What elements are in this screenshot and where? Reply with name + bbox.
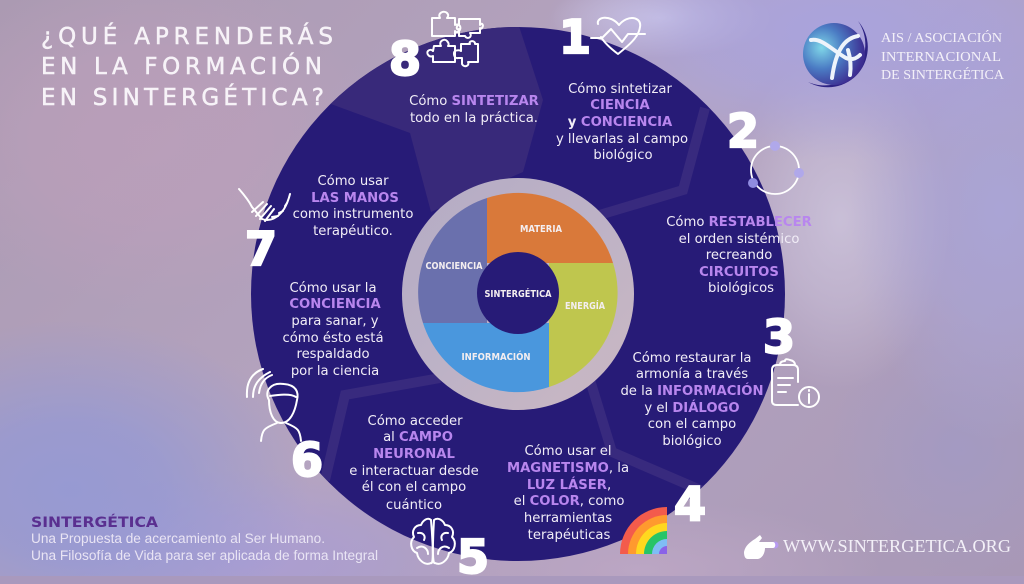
text 3: de la bbox=[620, 384, 657, 399]
text 3: y el bbox=[644, 401, 672, 416]
text 3: biológico bbox=[662, 433, 722, 449]
title: EN SINTERGÉTICA? bbox=[41, 83, 324, 111]
segment labels: CONCIENCIA bbox=[426, 261, 483, 272]
text 6: cómo ésto está bbox=[282, 330, 384, 346]
title bbox=[41, 22, 333, 111]
text 2: Cómo bbox=[666, 214, 709, 230]
logo: AIS bbox=[803, 21, 1004, 87]
logo sphere bbox=[803, 23, 865, 85]
text 1: biológico bbox=[593, 147, 653, 163]
icon: brain bbox=[411, 519, 455, 564]
outer ring bbox=[402, 178, 634, 410]
footer tagline: SINTERGÉTICA bbox=[31, 514, 158, 531]
text 2: biológicos bbox=[708, 280, 774, 296]
text 8: Cómo bbox=[409, 93, 452, 109]
logo text: AIS / ASOCIACIÓN bbox=[881, 30, 1002, 45]
icon: heart pulse bbox=[591, 18, 645, 54]
item 8 bbox=[389, 12, 539, 126]
number 1: 1 bbox=[559, 10, 591, 64]
text 5: NEURONAL bbox=[373, 447, 455, 462]
icon: head with waves bbox=[247, 369, 301, 441]
main dark circle bbox=[251, 20, 785, 561]
logo crescent bbox=[808, 21, 868, 87]
text 5: él con el campo bbox=[362, 479, 466, 495]
text 4: , la bbox=[609, 461, 629, 476]
segment labels bbox=[426, 224, 606, 363]
text 4: , bbox=[607, 478, 611, 493]
item 7 bbox=[239, 173, 413, 276]
lighter segment behind item 8 bbox=[320, 20, 543, 212]
text 8: todo en la práctica. bbox=[410, 110, 538, 126]
segment: energia bbox=[549, 263, 618, 387]
center circle bbox=[477, 252, 559, 334]
footer tagline: Una Propuesta de acercamiento al Ser Humano. bbox=[31, 531, 325, 546]
central diagram bbox=[402, 178, 634, 410]
text 6: CONCIENCIA bbox=[289, 297, 381, 312]
text 3: Cómo restaurar la bbox=[633, 350, 751, 366]
text 2: CIRCUITOS bbox=[699, 265, 779, 280]
text 7: como instrumento bbox=[293, 207, 413, 222]
text 7: terapéutico. bbox=[313, 223, 393, 239]
logo text bbox=[881, 30, 1004, 82]
text 5: Cómo acceder bbox=[368, 413, 463, 429]
segment: conciencia bbox=[418, 198, 487, 323]
text 6: Cómo usar la bbox=[289, 280, 377, 296]
item 6 bbox=[247, 280, 384, 487]
logo text: INTERNACIONAL bbox=[881, 49, 1001, 64]
text 4: herramientas bbox=[524, 511, 612, 526]
footer tagline: Una Filosofía de Vida para ser aplicada de forma Integral bbox=[31, 548, 378, 563]
text 4: terapéuticas bbox=[528, 527, 610, 543]
text 2: recreando bbox=[706, 248, 772, 263]
item 1 bbox=[556, 10, 688, 163]
segment labels: MATERIA bbox=[520, 224, 563, 235]
text 3: armonía a través bbox=[636, 366, 748, 382]
website link bbox=[744, 535, 1011, 559]
text 1: y bbox=[568, 115, 581, 130]
item 3 bbox=[620, 310, 819, 449]
text 2: el orden sistémico bbox=[679, 231, 799, 247]
text 4: MAGNETISMO bbox=[507, 461, 609, 476]
text 6: respaldado bbox=[296, 347, 370, 362]
number 5: 5 bbox=[457, 530, 489, 584]
segment labels: SINTERGÉTICA bbox=[484, 288, 552, 300]
text 4: LUZ LÁSER bbox=[527, 476, 607, 493]
website text: WWW.SINTERGETICA.ORG bbox=[783, 536, 1011, 556]
text 6: por la ciencia bbox=[291, 364, 379, 379]
text 3: DIÁLOGO bbox=[672, 399, 740, 416]
title: EN LA FORMACIÓN bbox=[41, 52, 322, 80]
number 3: 3 bbox=[763, 310, 795, 364]
text 4: el bbox=[514, 494, 530, 509]
text 4: COLOR, como bbox=[530, 494, 624, 509]
icon: hands bbox=[239, 189, 290, 221]
text 1: y llevarlas al campo bbox=[556, 132, 688, 147]
text 1: CONCIENCIA bbox=[581, 115, 673, 130]
text 3: con el campo bbox=[648, 417, 736, 432]
text 5: CAMPO bbox=[399, 430, 453, 445]
segment labels: ENERGÍA bbox=[565, 300, 606, 312]
text 6: para sanar, y bbox=[291, 314, 379, 329]
text 1: Cómo sintetizar bbox=[568, 81, 672, 97]
number 7: 7 bbox=[245, 222, 277, 276]
text 4: Cómo usar el bbox=[524, 443, 612, 459]
text 3: INFORMACIÓN bbox=[657, 381, 764, 399]
segment: informacion bbox=[423, 323, 549, 392]
number 8: 8 bbox=[389, 32, 421, 86]
text 5: al bbox=[383, 430, 399, 445]
icon: circuit ring bbox=[748, 141, 804, 194]
item 4 bbox=[508, 444, 705, 554]
number 6: 6 bbox=[291, 433, 323, 487]
icon: rainbow bbox=[620, 507, 667, 554]
icon: puzzle pieces bbox=[427, 12, 483, 66]
text 5: cuántico bbox=[386, 497, 442, 513]
segment: materia bbox=[487, 193, 613, 263]
number 4: 4 bbox=[674, 477, 706, 531]
text 2: RESTABLECER bbox=[709, 215, 812, 230]
text 8: SINTETIZAR bbox=[452, 94, 539, 109]
segment labels: INFORMACIÓN bbox=[462, 351, 531, 363]
icon: pointing hand bbox=[744, 535, 778, 559]
logo text: DE SINTERGÉTICA bbox=[881, 67, 1004, 82]
number 2: 2 bbox=[727, 104, 759, 158]
text 7: Cómo usar bbox=[317, 173, 389, 189]
text 1: CIENCIA bbox=[590, 98, 651, 113]
icon: clipboard info bbox=[772, 359, 819, 407]
footer tagline bbox=[31, 514, 378, 563]
item 5 bbox=[349, 413, 479, 564]
text 7: LAS MANOS bbox=[311, 191, 399, 206]
title: ¿QUÉ APRENDERÁS bbox=[41, 22, 333, 50]
text 5: e interactuar desde bbox=[349, 464, 479, 479]
item 2 bbox=[666, 104, 812, 296]
